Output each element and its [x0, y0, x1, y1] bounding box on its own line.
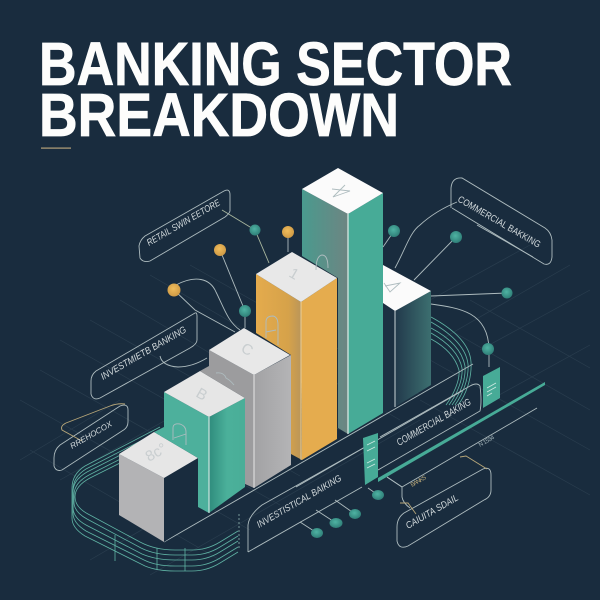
title: BREAKDOWN [39, 81, 399, 149]
curved track lines [72, 427, 239, 571]
title: BANKING SECTOR [39, 30, 512, 98]
label: investment banking [91, 313, 207, 399]
teal tag strip right [483, 367, 500, 408]
teal tag strip left [363, 433, 378, 485]
label: capital scale [387, 408, 537, 547]
label: investment banking: INVESTMIETB BANKING [99, 325, 189, 383]
label: capital scale: N 1534 [478, 435, 496, 449]
label: investistical banking: INVESTISTICAL BAIKING [255, 473, 344, 531]
bar B teal [154, 371, 245, 513]
title [39, 30, 512, 149]
connectors to dots [174, 202, 507, 533]
bar C grey: C [238, 340, 256, 360]
label: commercial banking top: COMMERCIAL BAKKING [456, 194, 542, 251]
label: capital scale: CAIUITA SDAIL [404, 493, 461, 532]
bar E tall teal [302, 168, 383, 434]
label: commercial banking lower: COMMERCIAL BAKING [395, 397, 473, 449]
bar D gold: 1 [286, 265, 302, 284]
title accent rule [41, 148, 71, 149]
label: prehocox [54, 404, 128, 470]
label: prehocox: RREHOCOX [68, 419, 114, 451]
label: capital scale: BANKS [410, 475, 428, 489]
bar F dark teal [383, 265, 431, 413]
right curved track lines [431, 317, 471, 405]
bar A grey: 8c° [142, 440, 170, 465]
node dots [168, 224, 512, 538]
label: retail [139, 190, 230, 262]
bar C grey [200, 328, 291, 488]
bar D gold [256, 252, 337, 460]
platform rail [164, 364, 481, 552]
label: retail: RETAIL SWIN EETORE [145, 197, 223, 249]
bar B teal: B [193, 385, 210, 404]
bar A grey [119, 432, 198, 542]
label: commercial banking top [451, 178, 552, 264]
teal floor strip [378, 382, 545, 482]
